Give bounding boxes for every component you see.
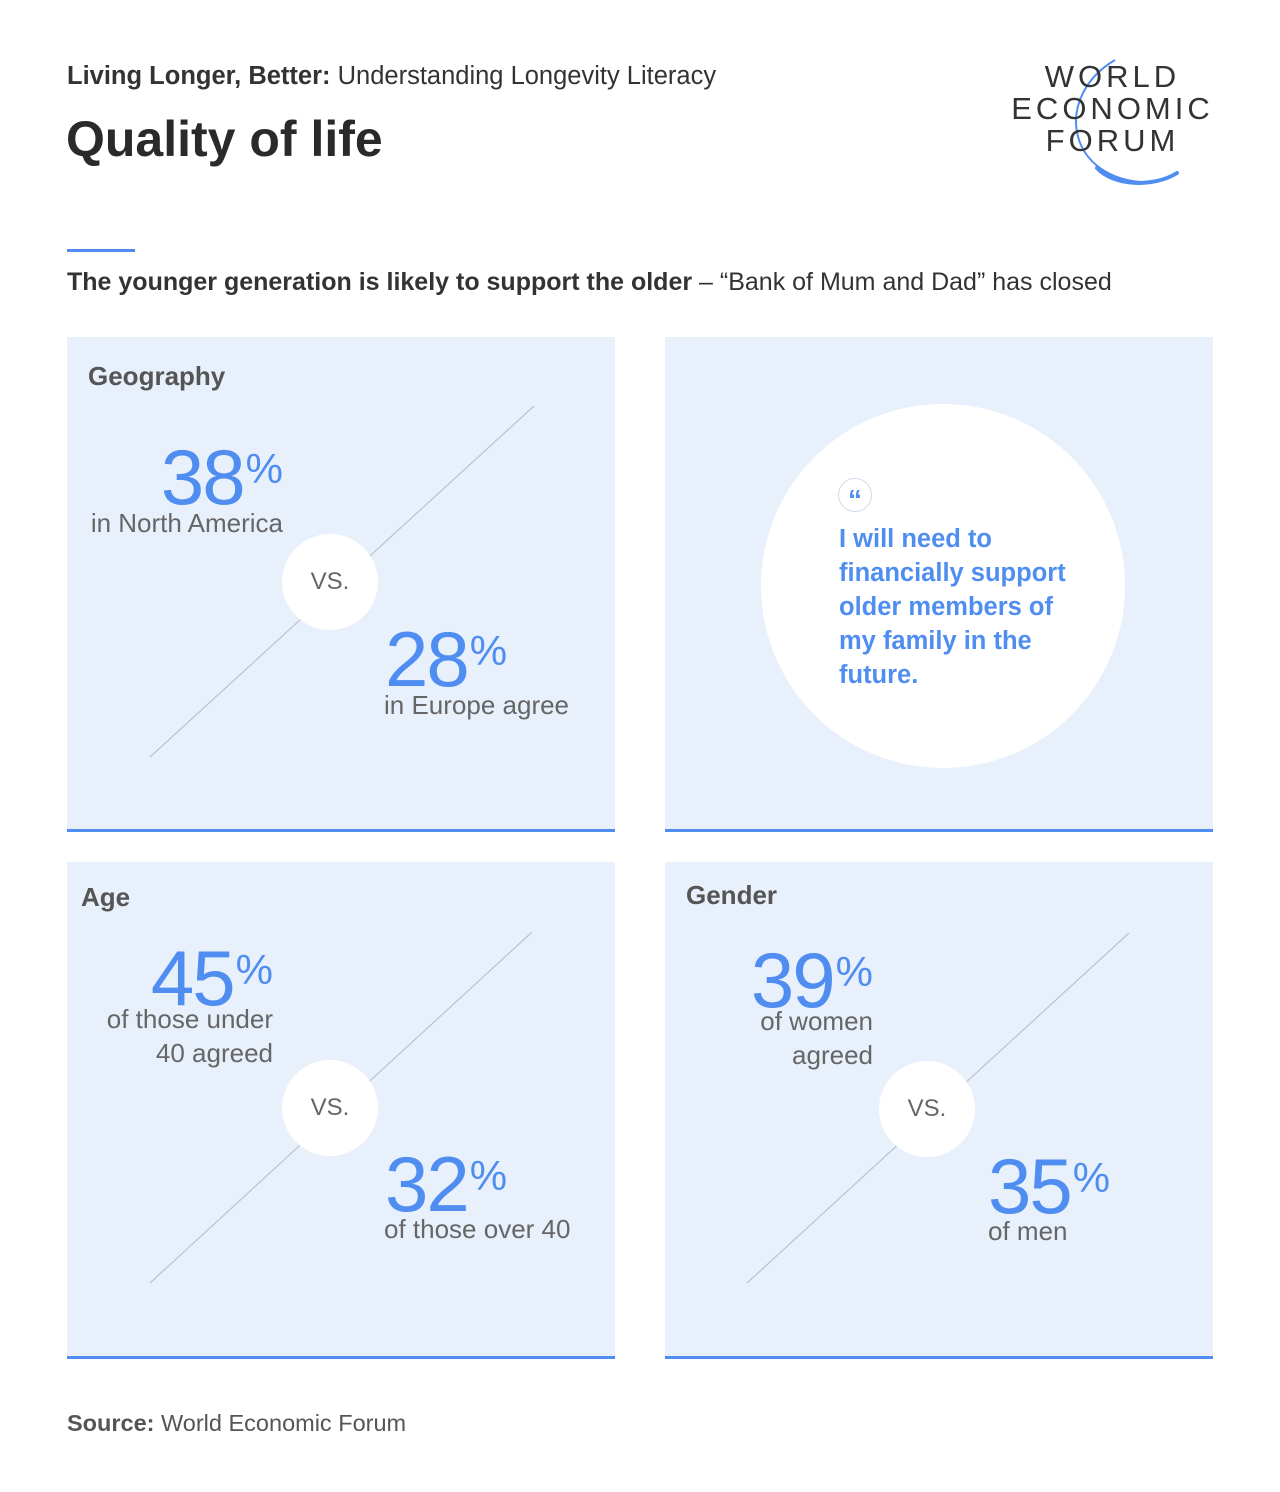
logo: World Economic Forum: WORLD bbox=[1045, 59, 1180, 94]
source: Source: World Economic Forum bbox=[67, 1410, 406, 1436]
vs circle bbox=[282, 1060, 378, 1156]
stat: 45% under 40: 40 agreed bbox=[156, 1038, 273, 1068]
stat: 32% over 40: of those over 40 bbox=[384, 1214, 570, 1244]
accent bar bbox=[67, 249, 135, 252]
quote text: I will need to bbox=[839, 525, 992, 553]
logo: World Economic Forum: FORUM bbox=[1046, 123, 1179, 158]
vs circle: VS. bbox=[311, 568, 349, 595]
panel: quote bbox=[665, 337, 1213, 832]
quote text: financially support bbox=[839, 559, 1066, 587]
vs circle bbox=[282, 534, 378, 630]
quote text: my family in the bbox=[839, 627, 1032, 655]
stat: 32% over 40 bbox=[384, 1140, 570, 1244]
heading: Gender: Gender bbox=[686, 880, 777, 910]
quote circle bbox=[761, 404, 1125, 768]
icon: quote mark bbox=[838, 478, 872, 512]
stat: 45% under 40: 45% bbox=[151, 934, 273, 1022]
stat: 28% Europe: 28% bbox=[385, 615, 507, 703]
heading: Age: Age bbox=[81, 882, 130, 912]
stat: 38% North America: in North America bbox=[91, 508, 283, 538]
vs circle: VS. bbox=[311, 1094, 349, 1121]
stat: 45% under 40 bbox=[107, 934, 273, 1068]
stat: 38% North America bbox=[91, 433, 283, 538]
heading: Geography: Geography bbox=[88, 361, 225, 391]
panel: geography bbox=[67, 337, 615, 832]
intro text: The younger generation is likely to support the older – “Bank of Mum and Dad” has closed bbox=[67, 268, 1112, 296]
icon: quote mark: “ bbox=[848, 484, 862, 515]
stat: 28% Europe: in Europe agree bbox=[384, 690, 569, 720]
logo: World Economic Forum bbox=[1011, 59, 1214, 185]
quote text bbox=[839, 525, 1066, 689]
stat: 39% women: 39% bbox=[751, 936, 873, 1024]
stat: 35% men: of men bbox=[988, 1216, 1068, 1246]
stat: 35% men: 35% bbox=[988, 1142, 1110, 1230]
stat: 39% women bbox=[751, 936, 873, 1070]
title: Quality of life bbox=[66, 111, 383, 167]
stat: 39% women: of women bbox=[760, 1006, 873, 1036]
stat: 45% under 40: of those under bbox=[107, 1004, 273, 1034]
stat: 32% over 40: 32% bbox=[385, 1140, 507, 1228]
quote text: older members of bbox=[839, 593, 1053, 621]
stat: 38% North America: 38% bbox=[161, 433, 283, 521]
logo: World Economic Forum: ECONOMIC bbox=[1011, 91, 1214, 126]
vs circle: VS. bbox=[908, 1095, 946, 1122]
quote text: future. bbox=[839, 661, 918, 689]
stat: 39% women: agreed bbox=[792, 1040, 873, 1070]
panel: gender bbox=[665, 862, 1213, 1359]
header subtitle: Living Longer, Better: Understanding Longevity Literacy bbox=[67, 62, 716, 90]
panel: age bbox=[67, 862, 615, 1359]
stat: 28% Europe bbox=[384, 615, 569, 720]
vs circle bbox=[879, 1061, 975, 1157]
